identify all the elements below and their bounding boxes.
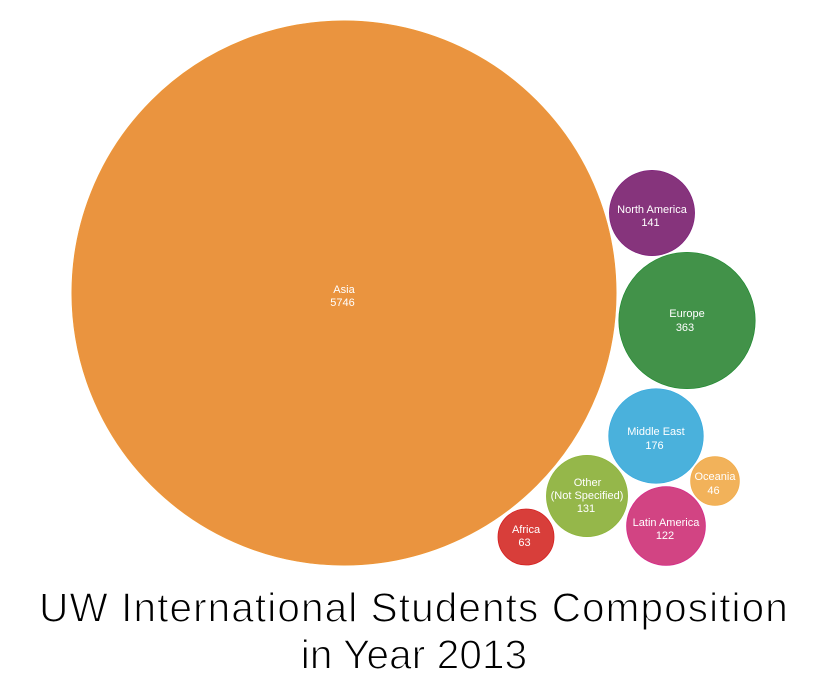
bubble: Latin America: [627, 487, 705, 565]
bubble: Africa: [498, 509, 554, 565]
title: in Year 2013: [301, 632, 527, 678]
bubble: Other (Not Specified): [546, 455, 628, 537]
bubble: Latin America: Latin America: [633, 517, 700, 529]
bubble: North America: [609, 170, 695, 256]
bubble: Middle East: Middle East: [627, 426, 685, 438]
bubble: Oceania: Oceania: [695, 471, 736, 483]
bubble: Other (Not Specified): 131: [577, 503, 595, 515]
bubble: Latin America: 122: [656, 530, 674, 542]
bubble: Europe: [619, 252, 755, 389]
bubble: Asia: 5746: [330, 297, 355, 309]
bubble: Oceania: [691, 457, 739, 505]
bubble: Asia: [72, 21, 616, 565]
bubble: North America: 141: [641, 217, 660, 229]
bubble: North America: North America: [617, 204, 688, 216]
bubble: Other (Not Specified): (Not Specified): [551, 490, 623, 502]
bubble: Africa: 63: [518, 537, 531, 549]
bubble: Europe: Europe: [669, 308, 705, 320]
title: [39, 584, 789, 678]
bubble: Other (Not Specified): Other: [574, 477, 602, 489]
bubble: Europe: 363: [676, 322, 694, 334]
bubble: Middle East: 176: [645, 440, 664, 452]
bubble: Asia: Asia: [333, 284, 356, 296]
title: UW International Students Composition: [39, 584, 789, 630]
bubble: Middle East: [609, 389, 703, 483]
bubble: Oceania: 46: [707, 485, 720, 497]
bubble: Africa: Africa: [512, 524, 541, 536]
